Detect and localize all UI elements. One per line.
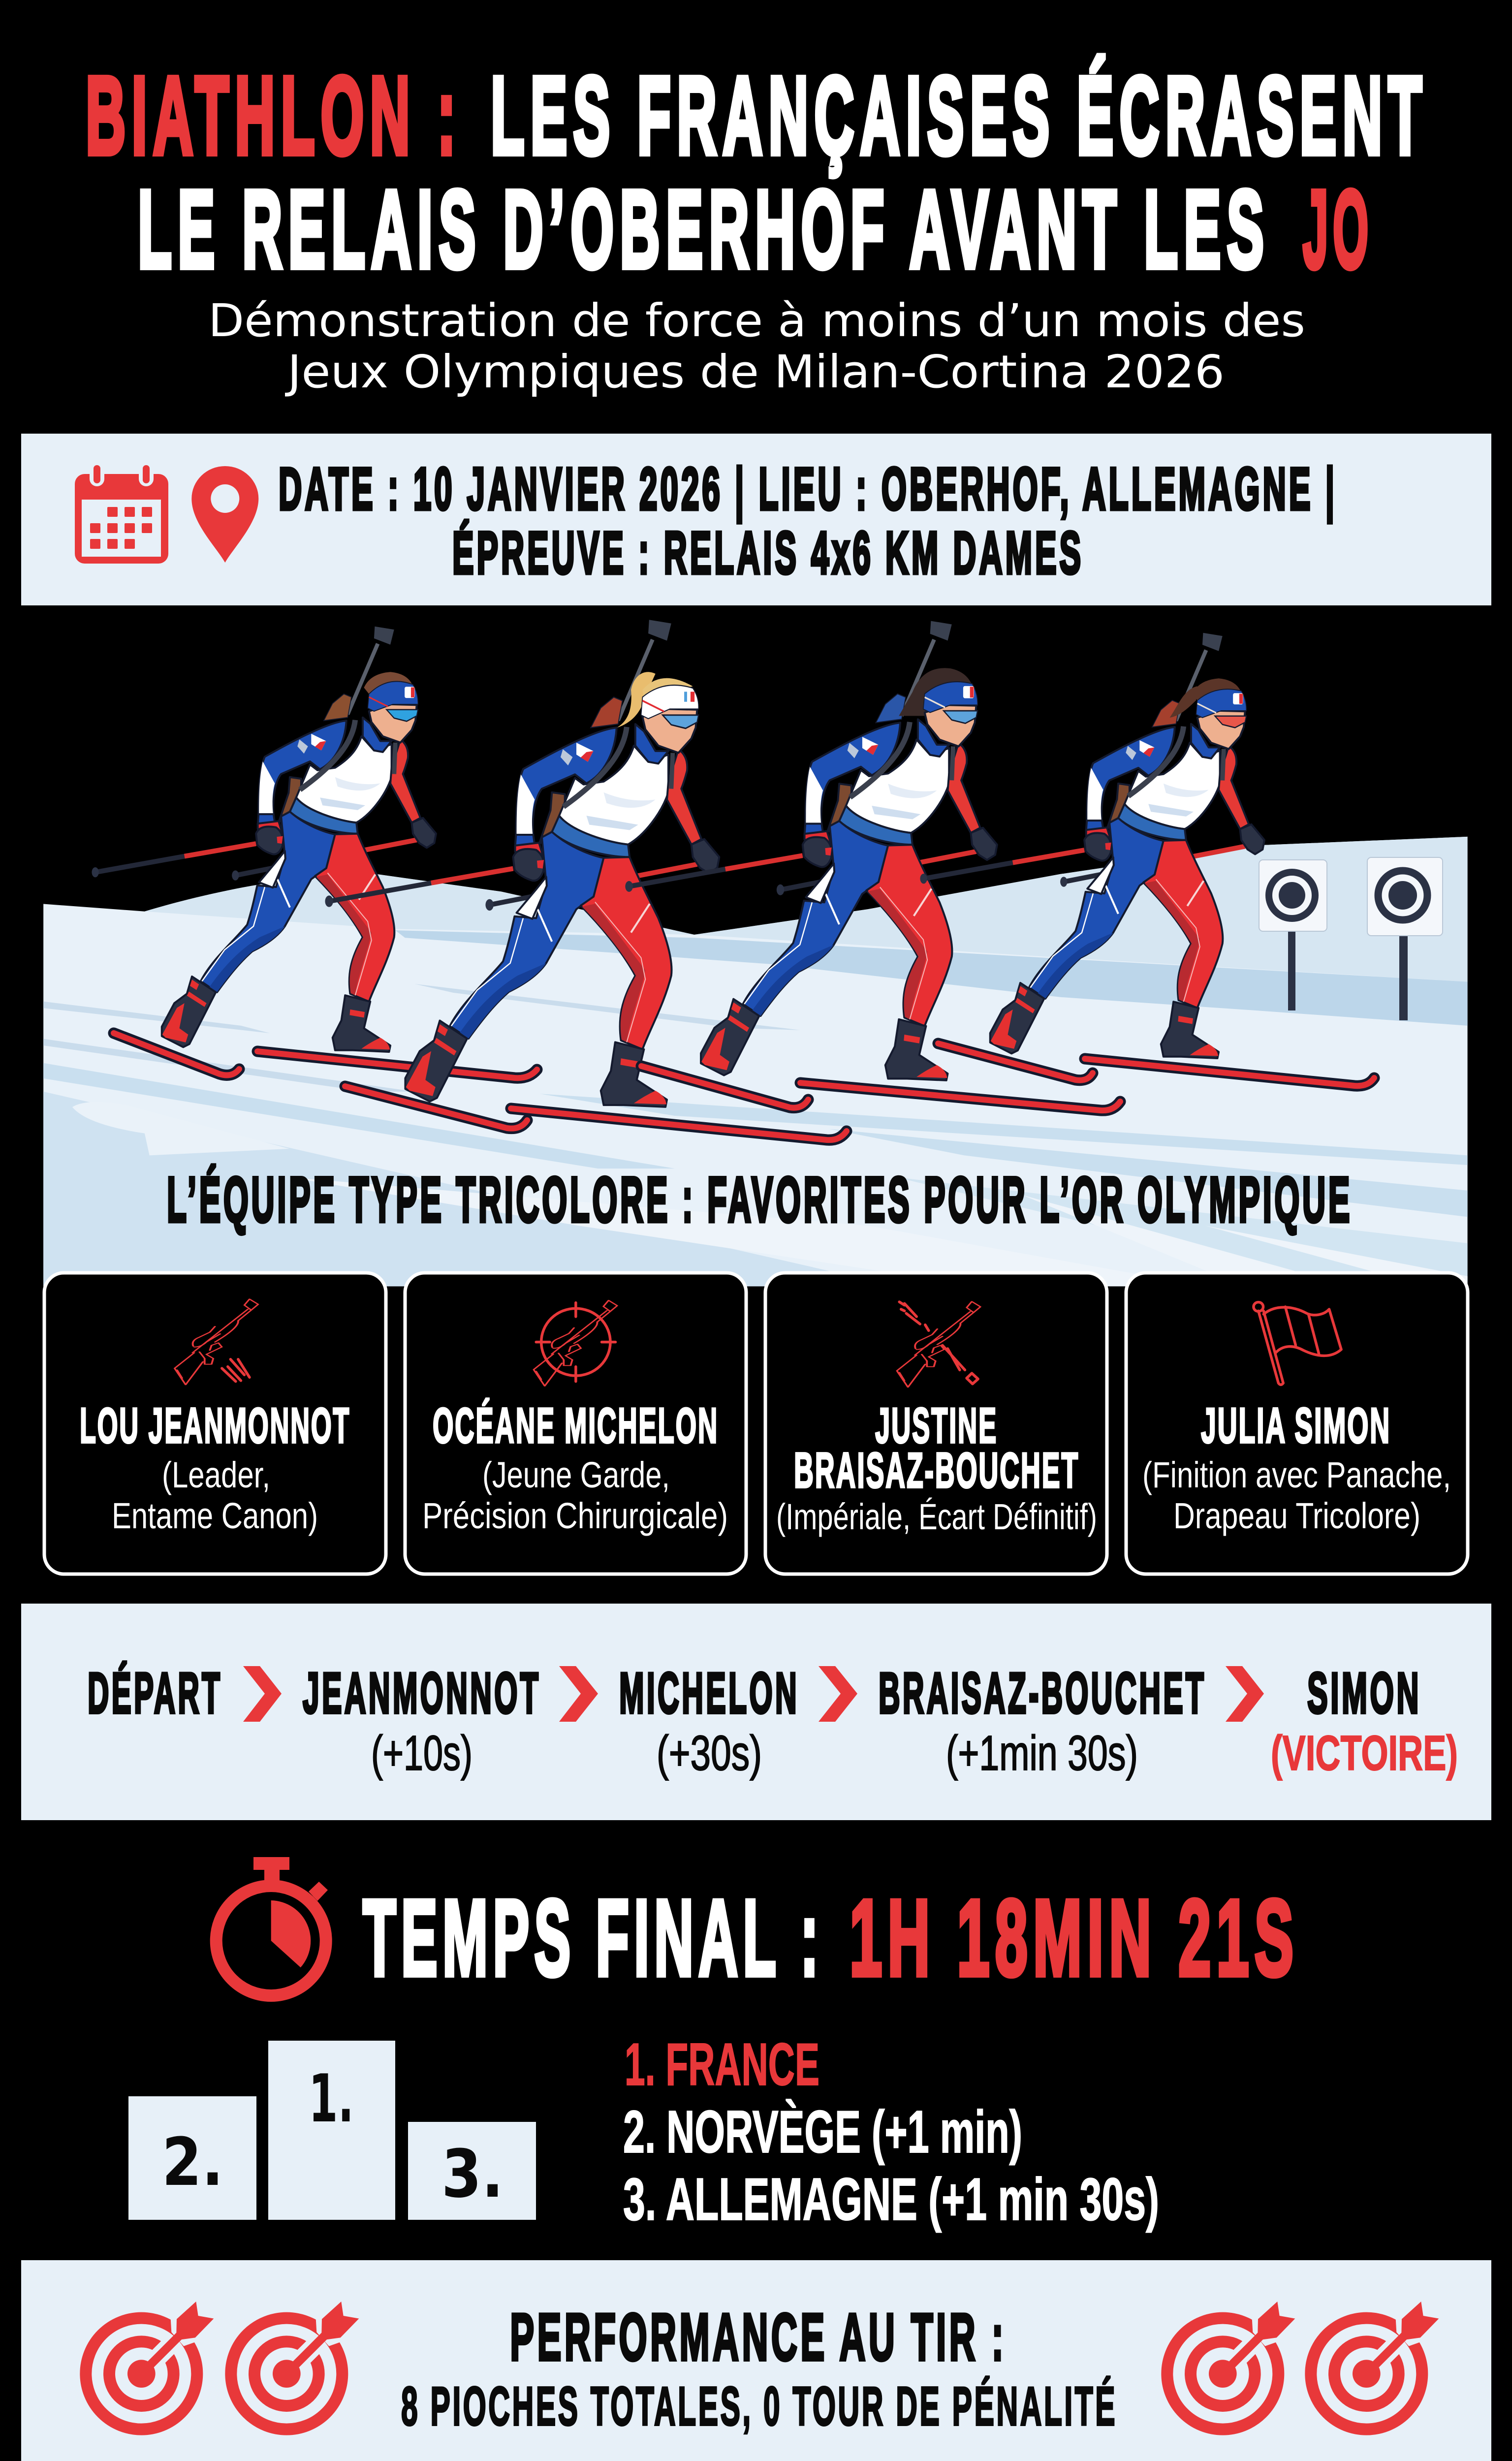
podium: 1. (309, 2060, 354, 2137)
card: Julia Simon: (Finition avec Panache, (1142, 1454, 1451, 1495)
card: Justine Braisaz-Bouchet: JUSTINE (875, 1398, 998, 1453)
relay names: JEANMONNOT (303, 1661, 541, 1725)
relay gaps: (+30s) (657, 1726, 762, 1781)
final time (216, 1857, 1299, 1998)
skier 4 (920, 633, 1374, 1086)
ranking: 1. FRANCE (625, 2031, 819, 2098)
icon: stopwatch (216, 1857, 328, 1995)
card: Lou Jeanmonnot: (Leader, (162, 1454, 270, 1495)
snow background (43, 837, 1468, 1286)
icon: crossed rifles (897, 1301, 980, 1387)
card: Julia Simon: Drapeau Tricolore) (1173, 1495, 1420, 1536)
panel: relay progression (21, 1604, 1491, 1820)
panel: athlete cards (44, 1273, 1468, 1574)
icon: target 1 (86, 2294, 217, 2429)
date text (279, 455, 1337, 586)
icon: calendar (75, 463, 168, 564)
icon: rifle in crosshair (534, 1300, 617, 1386)
card: Lou Jeanmonnot (44, 1273, 386, 1574)
relay gaps (371, 1726, 1458, 1781)
shooting text (401, 2300, 1117, 2437)
skier 3 (625, 621, 1120, 1110)
subtitle (208, 294, 1305, 398)
title: JO (1303, 168, 1373, 291)
icon: rifle with bullets (175, 1299, 258, 1385)
podium (128, 2041, 536, 2220)
card: Lou Jeanmonnot: LOU JEANMONNOT (80, 1398, 350, 1453)
podium: 2. (162, 2124, 223, 2201)
card: Lou Jeanmonnot: Entame Canon) (112, 1495, 318, 1536)
card: Océane Michelon: Précision Chirurgicale) (422, 1495, 728, 1536)
relay names: MICHELON (619, 1661, 799, 1725)
arrow: chevrons (243, 1666, 1264, 1722)
icon: flag (1254, 1302, 1341, 1385)
podium: 3. (441, 2136, 504, 2212)
shooting text: PERFORMANCE AU TIR : (510, 2300, 1007, 2374)
title: BIATHLON : (86, 54, 462, 177)
panel: skiers scene (43, 620, 1468, 1286)
icon: target 4 (1311, 2294, 1442, 2429)
icon: shooting target signs (1259, 857, 1443, 1020)
icon: target 3 (1167, 2294, 1298, 2429)
skier 2 (325, 620, 847, 1140)
card: Océane Michelon: OCÉANE MICHELON (433, 1398, 719, 1453)
panel: date and place (21, 434, 1491, 605)
time text: TEMPS FINAL : (363, 1877, 823, 1998)
card: Justine Braisaz-Bouchet: BRAISAZ-BOUCHET (794, 1443, 1079, 1498)
ranking: 3. ALLEMAGNE (+1 min 30s) (623, 2166, 1159, 2233)
card: Océane Michelon: (Jeune Garde, (482, 1454, 670, 1495)
relay gaps: (+1min 30s) (946, 1726, 1138, 1781)
relay names (88, 1661, 1421, 1725)
relay names: DÉPART (88, 1661, 222, 1725)
card: Justine Braisaz-Bouchet (765, 1273, 1107, 1574)
subtitle: Jeux Olympiques de Milan-Cortina 2026 (285, 346, 1225, 398)
title (86, 54, 1428, 291)
panel: shooting performance (21, 2260, 1491, 2461)
ranking: 2. NORVÈGE (+1 min) (623, 2098, 1022, 2165)
card: Océane Michelon (405, 1273, 746, 1574)
ranking (623, 2031, 1159, 2233)
relay names: BRAISAZ-BOUCHET (879, 1661, 1206, 1725)
card: Justine Braisaz-Bouchet: (Impériale, Écart Définitif) (776, 1496, 1097, 1537)
icon: location pin (191, 466, 258, 563)
card: Julia Simon (1126, 1273, 1468, 1574)
icon: target 2 (231, 2294, 362, 2429)
relay gaps: (+10s) (371, 1726, 472, 1781)
subtitle: Démonstration de force à moins d’un mois des (208, 294, 1305, 347)
skier 1 (92, 627, 537, 1078)
